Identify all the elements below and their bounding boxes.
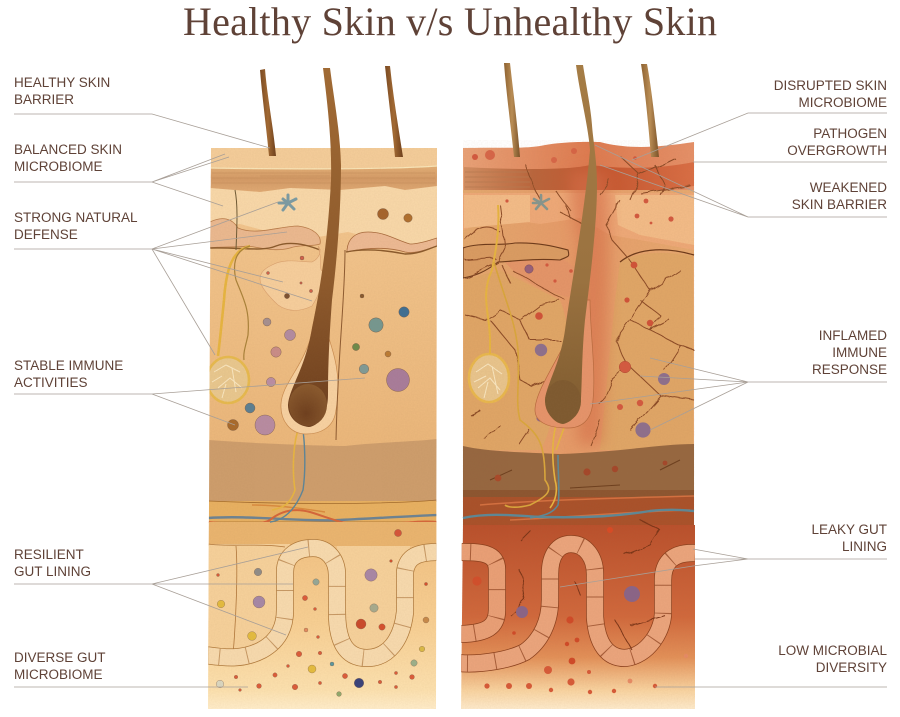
star microbe icon (533, 195, 549, 209)
red gut villi lining (458, 544, 695, 663)
gut background (208, 522, 437, 709)
healthy epidermis top layer (208, 148, 437, 178)
label: healthy skin barrier: HEALTHY SKIN (14, 75, 110, 90)
label: leaky gut lining: LEAKY GUT (811, 522, 887, 537)
label: stable immune activities: ACTIVITIES (14, 375, 88, 390)
label: pathogen overgrowth: PATHOGEN (813, 126, 887, 141)
label: strong natural defense: STRONG NATURAL (14, 210, 138, 225)
inflamed dermis (463, 190, 694, 455)
panel: healthy skin (205, 66, 440, 709)
gut microbes (216, 529, 429, 696)
sebaceous gland (207, 357, 249, 403)
label: leaky gut lining: LINING (842, 539, 887, 554)
follicle sheath (535, 300, 594, 428)
label: resilient gut lining: GUT LINING (14, 564, 91, 579)
title: Healthy Skin v/s Unhealthy Skin (183, 0, 717, 44)
hair: follicle and shaft (288, 68, 341, 427)
cracks in skin (465, 156, 694, 445)
panel: unhealthy skin (458, 63, 695, 709)
label: healthy skin barrier: BARRIER (14, 92, 74, 107)
label: balanced skin microbiome: MICROBIOME (14, 159, 103, 174)
label: low microbial diversity: LOW MICROBIAL (778, 643, 887, 658)
inflamed dots (472, 148, 688, 694)
label: weakened skin barrier: WEAKENED (810, 180, 887, 195)
tan skin plates (545, 253, 693, 446)
inflamed epidermis top (463, 142, 694, 190)
sebaceous gland (469, 354, 509, 402)
red inflammation column around hair (570, 170, 609, 445)
right leader lines (560, 113, 887, 687)
label: pathogen overgrowth: OVERGROWTH (787, 143, 887, 158)
label: strong natural defense: DEFENSE (14, 227, 78, 242)
pale reddish upper dermis (463, 193, 678, 246)
hair follicle sheath (281, 300, 338, 434)
red vascular layer (463, 496, 694, 525)
label: diverse gut microbiome: MICROBIOME (14, 667, 103, 682)
label: stable immune activities: STABLE IMMUNE (14, 358, 123, 373)
nerve fibers (218, 190, 305, 522)
healthy dermis base (208, 188, 437, 450)
star microbe icon (279, 195, 296, 210)
upper pale layer (208, 186, 437, 246)
hair: left shaft (260, 69, 276, 156)
healthy panel grain texture (226, 707, 227, 708)
pale follicle lobe (260, 246, 326, 310)
fat layer (208, 439, 437, 502)
label: disrupted skin microbiome: DISRUPTED SKIN (774, 78, 887, 93)
label: weakened skin barrier: SKIN BARRIER (792, 197, 887, 212)
label: inflamed immune response: IMMUNE (832, 345, 887, 360)
fat layer (463, 444, 694, 490)
label: balanced skin microbiome: BALANCED SKIN (14, 142, 122, 157)
unhealthy panel grain texture (461, 140, 695, 709)
hair: right shaft (385, 66, 403, 157)
label: inflamed immune response: RESPONSE (812, 362, 887, 377)
nerve fibers (486, 205, 565, 518)
label: inflamed immune response: INFLAMED (819, 328, 887, 343)
papilla outline (463, 243, 569, 278)
gut cell regions (208, 544, 410, 658)
cracks in fat layer (490, 460, 680, 488)
red gut background (461, 525, 695, 709)
label: diverse gut microbiome: DIVERSE GUT (14, 650, 106, 665)
cracks in gut (510, 520, 665, 650)
pink dermal papillae (210, 219, 437, 254)
gut villi lining (205, 548, 440, 658)
label: resilient gut lining: RESILIENT (14, 547, 84, 562)
hair: right shaft (641, 64, 659, 157)
left leader lines (14, 114, 365, 687)
red barrier band (464, 162, 694, 193)
label: disrupted skin microbiome: MICROBIOME (798, 95, 887, 110)
striped barrier band (210, 166, 437, 192)
vascular layer (208, 500, 437, 525)
hair follicle and shaft (545, 65, 597, 424)
skin immune dots (228, 208, 412, 435)
hair: left shaft (504, 63, 520, 157)
label: low microbial diversity: DIVERSITY (816, 660, 887, 675)
